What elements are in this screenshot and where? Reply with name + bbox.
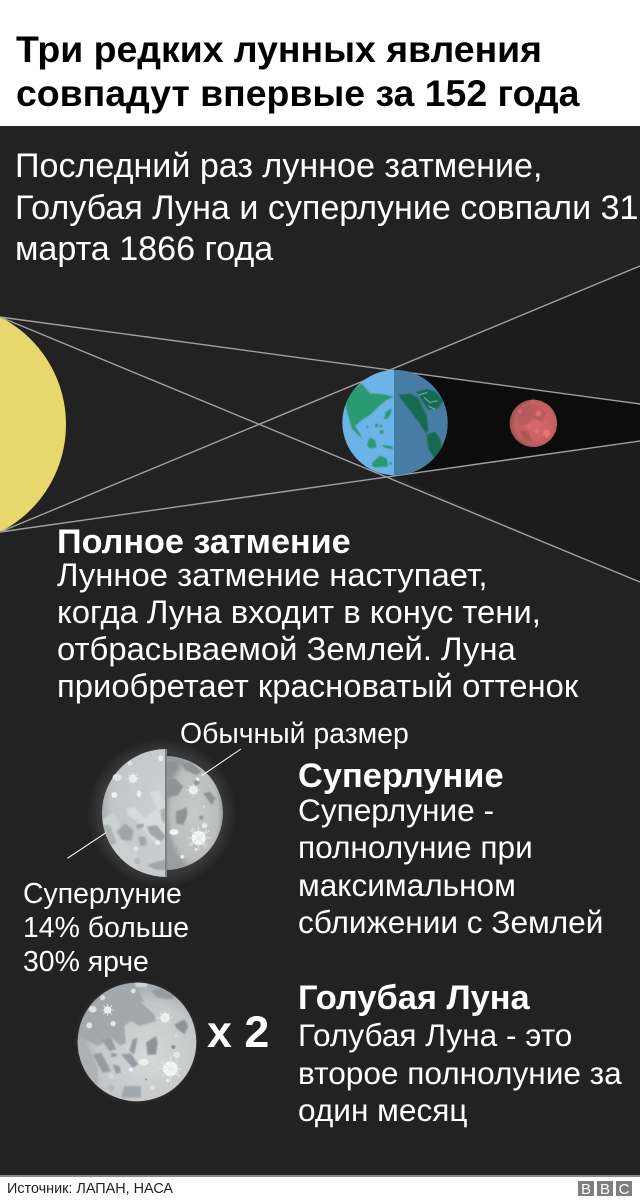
intro text: Голубая Луна и суперлуние совпали 31 bbox=[15, 189, 638, 227]
title bbox=[16, 28, 581, 114]
supermoon text: Суперлуние bbox=[298, 757, 504, 795]
total eclipse text: отбрасываемой Землей. Луна bbox=[57, 630, 516, 667]
BBC logo: B bbox=[581, 1181, 591, 1198]
supermoon text: Суперлуние - bbox=[298, 792, 494, 828]
icon: red moon bbox=[510, 400, 557, 447]
blue moon text: один месяц bbox=[298, 1092, 467, 1128]
supermoon text: полнолуние при bbox=[298, 829, 533, 865]
penumbra shading bbox=[395, 266, 640, 582]
title: Три редких лунных явления bbox=[16, 28, 542, 70]
supermoon text: сближении с Землей bbox=[298, 904, 603, 940]
icon: blue moon bbox=[78, 982, 196, 1102]
supermoon text bbox=[298, 757, 603, 940]
moon glow bbox=[87, 738, 237, 888]
eclipse diagram bbox=[0, 266, 640, 582]
sun bbox=[0, 304, 66, 545]
icon: earth bbox=[342, 367, 451, 480]
total eclipse text: приобретает красноватый оттенок bbox=[57, 667, 579, 704]
label: supermoon stats: Суперлуние bbox=[23, 878, 182, 910]
intro text: марта 1866 года bbox=[15, 230, 273, 268]
normal moon half bbox=[165, 749, 223, 877]
supermoon comparison illustration bbox=[67, 738, 241, 888]
blue moon text: Голубая Луна bbox=[298, 979, 530, 1017]
total eclipse text: Полное затмение bbox=[57, 523, 351, 561]
total eclipse text bbox=[57, 523, 579, 704]
footer bbox=[0, 1175, 640, 1200]
supermoon text: максимальном bbox=[298, 867, 516, 903]
source: Источник: ЛАПАН, НАСА bbox=[7, 1181, 173, 1197]
label: supermoon stats: 14% больше bbox=[23, 912, 189, 944]
BBC logo: B bbox=[600, 1181, 610, 1198]
intro text: Последний раз лунное затмение, bbox=[15, 147, 542, 185]
blue moon text: второе полнолуние за bbox=[298, 1055, 622, 1091]
blue moon text bbox=[298, 979, 622, 1128]
label: normal size: Обычный размер bbox=[180, 718, 409, 750]
total eclipse text: Лунное затмение наступает, bbox=[57, 556, 487, 593]
BBC logo bbox=[578, 1181, 632, 1198]
label: supermoon stats bbox=[23, 878, 189, 978]
BBC logo: C bbox=[619, 1181, 630, 1198]
intro text bbox=[15, 147, 638, 268]
blue moon text: Голубая Луна - это bbox=[298, 1017, 572, 1053]
multiplier x 2: x 2 bbox=[207, 1007, 269, 1057]
umbra shadow cone bbox=[395, 370, 640, 476]
label: supermoon stats: 30% ярче bbox=[23, 946, 149, 978]
title: совпадут впервые за 152 года bbox=[16, 72, 581, 114]
pointer lines bbox=[67, 749, 241, 858]
light ray lines bbox=[0, 266, 640, 582]
supermoon half bbox=[102, 749, 166, 877]
total eclipse text: когда Луна входит в конус тени, bbox=[57, 593, 541, 630]
